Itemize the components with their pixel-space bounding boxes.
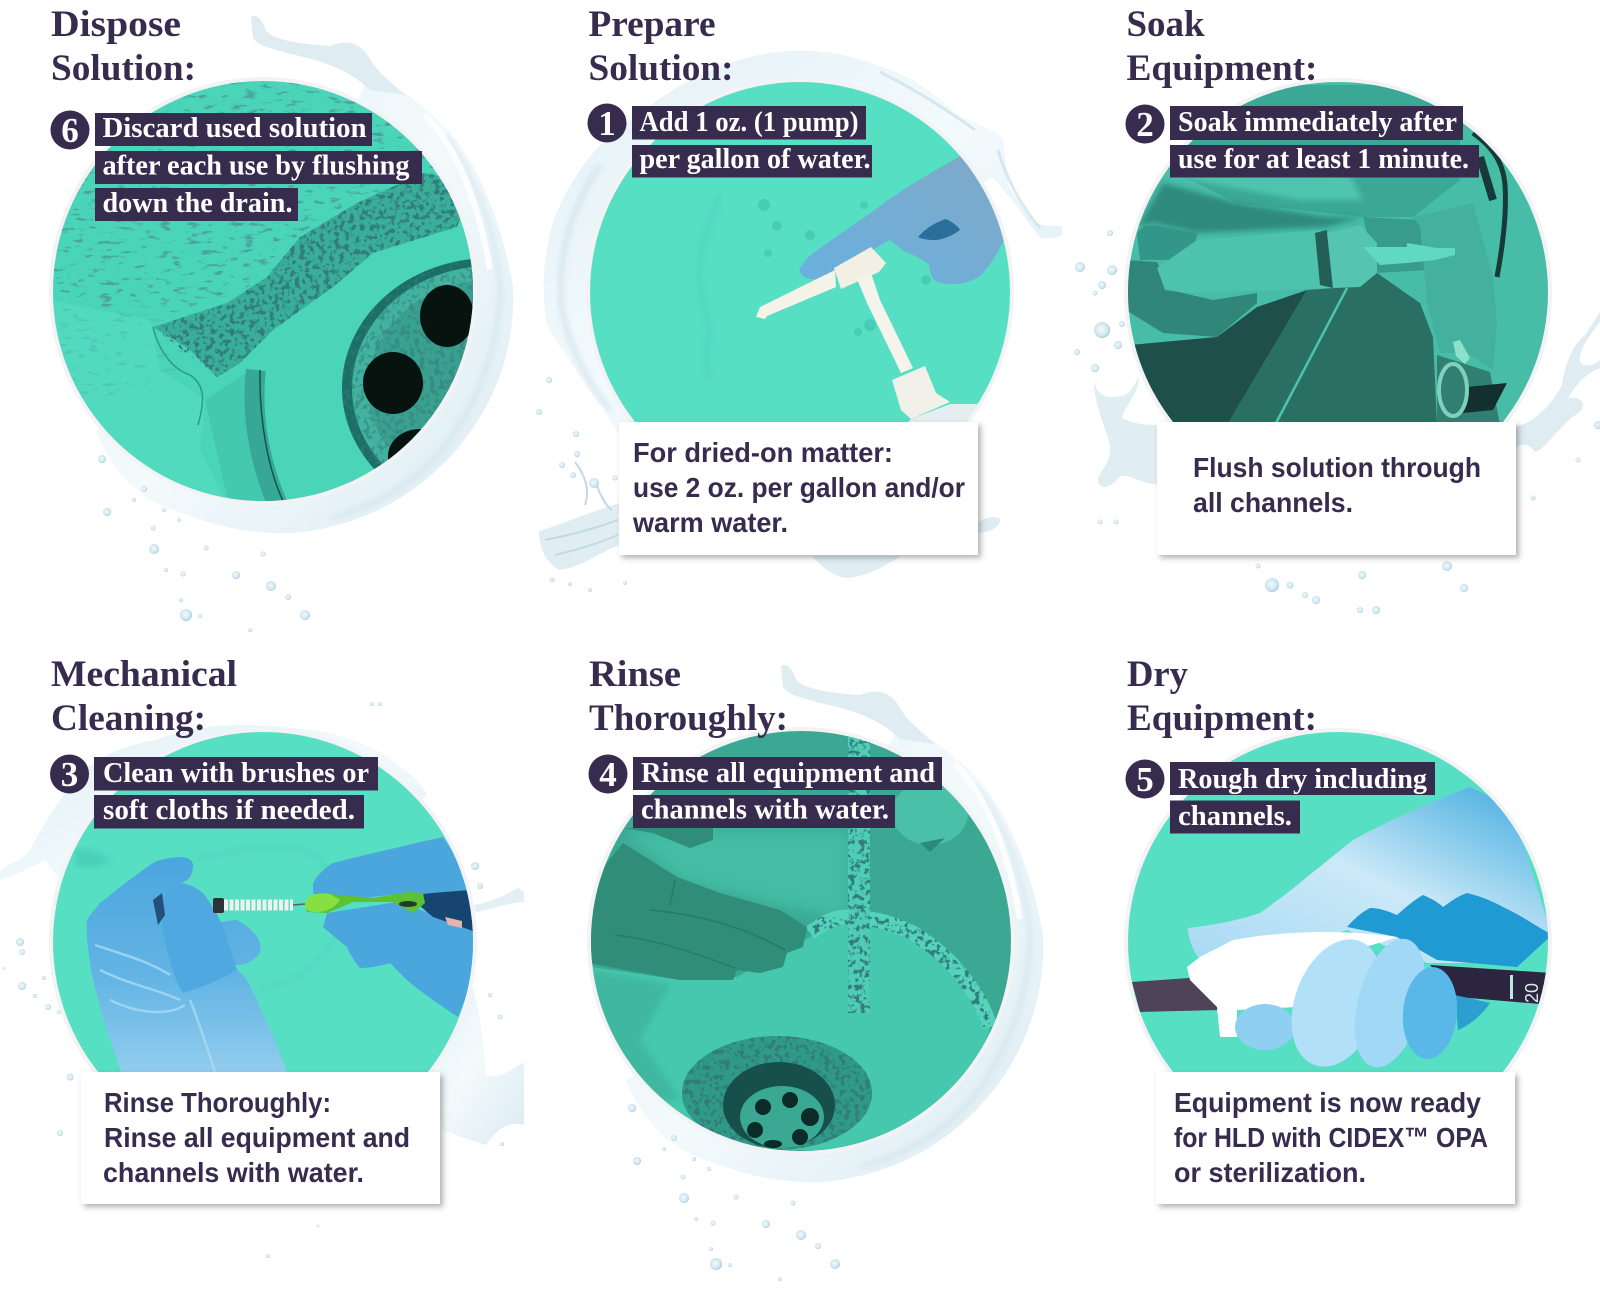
step badge 3: 3 bbox=[61, 755, 78, 794]
step text: Soak immediately after bbox=[1178, 107, 1457, 138]
step text: per gallon of water. bbox=[640, 144, 870, 175]
step text: channels with water. bbox=[641, 794, 889, 826]
circle rim bbox=[1124, 78, 1552, 506]
note box: or sterilization. bbox=[1174, 1157, 1366, 1188]
step text bbox=[94, 757, 378, 828]
title: Thoroughly: bbox=[589, 698, 788, 739]
title: Dispose bbox=[51, 4, 181, 45]
title: Solution: bbox=[588, 48, 734, 89]
note box: Rinse all equipment and bbox=[104, 1122, 410, 1153]
photo: gauze and scope in glove bbox=[1128, 732, 1548, 1072]
note box bbox=[81, 1072, 440, 1204]
note box: Equipment is now ready bbox=[1174, 1087, 1481, 1118]
note box bbox=[1157, 422, 1516, 555]
step text bbox=[95, 113, 422, 221]
water swirl bbox=[96, 16, 513, 632]
photo: sink with running water bbox=[588, 728, 1014, 1154]
step badge 1: 1 bbox=[598, 104, 616, 143]
note box: for HLD with CIDEX™ OPA bbox=[1174, 1122, 1488, 1153]
circle rim bbox=[587, 727, 1015, 1155]
title bbox=[1126, 4, 1318, 89]
step text: use for at least 1 minute. bbox=[1178, 144, 1469, 175]
step text: channels. bbox=[1178, 801, 1292, 832]
step text bbox=[632, 106, 872, 178]
photo: gauze and scope in glove: 20 bbox=[1522, 983, 1542, 1003]
step badge 4 bbox=[588, 754, 628, 794]
circle rim bbox=[49, 77, 477, 505]
step text: Clean with brushes or bbox=[103, 758, 369, 789]
step badge 6: 6 bbox=[61, 111, 79, 150]
title: Dry bbox=[1127, 654, 1188, 695]
note box: Flush solution through bbox=[1193, 452, 1481, 483]
step text: Add 1 oz. (1 pump) bbox=[640, 107, 858, 138]
title: Solution: bbox=[51, 48, 196, 89]
title bbox=[1127, 654, 1317, 739]
step text: soft cloths if needed. bbox=[103, 795, 355, 826]
step badge 3 bbox=[50, 754, 89, 794]
photo: drain with water bbox=[53, 81, 473, 501]
step text bbox=[1170, 762, 1435, 834]
title bbox=[589, 654, 788, 739]
panel: dry equipment bbox=[1124, 654, 1552, 1204]
step text: Rough dry including bbox=[1178, 764, 1427, 795]
photo: brush and gloves bbox=[53, 732, 473, 1072]
title bbox=[588, 4, 734, 89]
step text: after each use by flushing bbox=[102, 150, 410, 182]
note box: warm water. bbox=[632, 507, 788, 538]
circle rim bbox=[1124, 728, 1552, 1156]
panel: dispose solution bbox=[49, 10, 514, 632]
step badge 6 bbox=[50, 110, 90, 150]
step badge 1 bbox=[588, 104, 626, 143]
title: Equipment: bbox=[1126, 48, 1318, 89]
title: Rinse bbox=[589, 654, 681, 695]
title: Mechanical bbox=[51, 654, 237, 695]
panel: mechanical cleaning bbox=[0, 654, 524, 1258]
note box: channels with water. bbox=[103, 1157, 364, 1188]
title bbox=[51, 4, 196, 89]
circle rim bbox=[49, 728, 477, 1156]
panel: prepare solution bbox=[536, 4, 1062, 592]
note box: all channels. bbox=[1193, 487, 1353, 518]
step badge 4: 4 bbox=[599, 755, 617, 794]
water splashes bbox=[1074, 230, 1600, 614]
note box bbox=[619, 422, 978, 555]
step badge 2: 2 bbox=[1136, 105, 1154, 144]
note box: use 2 oz. per gallon and/or bbox=[633, 472, 965, 503]
panel: soak equipment bbox=[1074, 4, 1600, 614]
step text: Discard used solution bbox=[102, 113, 367, 144]
title: Prepare bbox=[588, 4, 716, 45]
photo: syringe and gloves bbox=[1128, 82, 1548, 422]
note box: Rinse Thoroughly: bbox=[104, 1087, 331, 1118]
title: Soak bbox=[1126, 4, 1205, 45]
step badge 5 bbox=[1126, 760, 1164, 799]
step text bbox=[633, 757, 942, 828]
title: Equipment: bbox=[1127, 698, 1317, 739]
note box: For dried-on matter: bbox=[633, 437, 893, 468]
photo: pump and glove bbox=[590, 82, 1010, 422]
note box bbox=[1156, 1072, 1515, 1204]
title: Cleaning: bbox=[51, 698, 206, 739]
water swirl bbox=[536, 51, 1062, 592]
step badge 5: 5 bbox=[1136, 760, 1154, 799]
water swirl bbox=[626, 665, 1043, 1281]
title bbox=[51, 654, 237, 739]
water swirl bbox=[0, 702, 524, 1258]
step text: Rinse all equipment and bbox=[641, 758, 935, 789]
step text bbox=[1170, 106, 1479, 178]
circle rim bbox=[586, 78, 1014, 506]
panel: rinse thoroughly bbox=[587, 654, 1043, 1281]
step text: down the drain. bbox=[102, 188, 292, 219]
step badge 2 bbox=[1126, 104, 1164, 144]
